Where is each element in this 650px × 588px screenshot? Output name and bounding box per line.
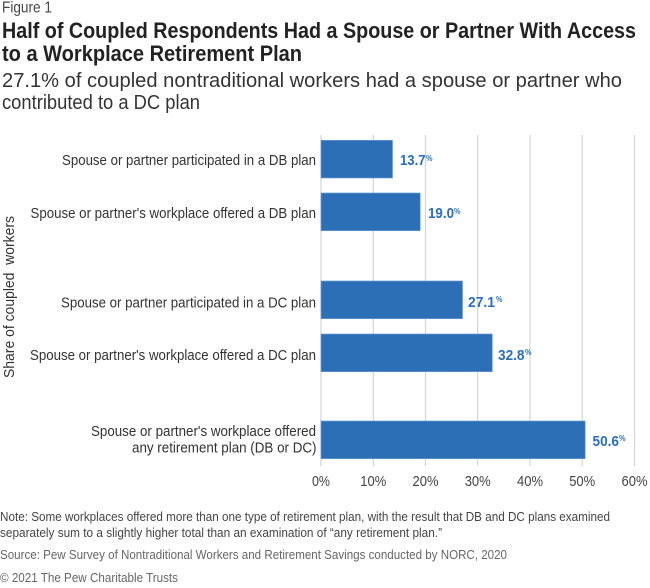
x-axis tick labels: 10% bbox=[360, 473, 386, 490]
title bbox=[2, 18, 636, 66]
x-axis tick labels: 20% bbox=[412, 473, 438, 490]
x-axis tick labels: 50% bbox=[569, 473, 595, 490]
x-axis tick labels bbox=[312, 473, 648, 490]
row: offered a DB plan: Spouse or partner's workplace offered a DB plan bbox=[30, 206, 316, 222]
row: offered a DB plan: 19.0 bbox=[428, 205, 454, 222]
note: Note: Some workplaces offered more than one type of retirement plan, with the result that DB and DC plans examined bbox=[0, 510, 610, 524]
row: participated in a DC plan bbox=[61, 281, 502, 319]
gridlines bbox=[321, 135, 634, 466]
source: Source: Pew Survey of Nontraditional Workers and Retirement Savings conducted by NORC, 2020 bbox=[0, 548, 507, 562]
bar chart bbox=[1, 135, 648, 490]
row: offered any retirement plan: any retirement plan (DB or DC) bbox=[132, 440, 316, 456]
row: offered any retirement plan: % bbox=[619, 434, 626, 443]
note bbox=[0, 510, 610, 540]
subtitle: contributed to a DC plan bbox=[2, 91, 200, 114]
title: to a Workplace Retirement Plan bbox=[2, 41, 302, 66]
y-axis title: Share of coupled workers bbox=[1, 216, 18, 378]
subtitle: 27.1% of coupled nontraditional workers had a spouse or partner who bbox=[2, 69, 622, 92]
row: participated in a DB plan bbox=[62, 140, 432, 178]
row: offered a DC plan bbox=[30, 334, 532, 372]
row: offered a DB plan: % bbox=[454, 207, 460, 216]
row: participated in a DC plan: % bbox=[496, 295, 502, 304]
figure label: Figure 1 bbox=[2, 0, 52, 16]
row: participated in a DC plan: Spouse or partner participated in a DC plan bbox=[61, 296, 316, 312]
row: participated in a DB plan: % bbox=[426, 154, 432, 163]
note: separately sum to a slightly higher total than an examination of “any retirement plan.” bbox=[0, 526, 442, 540]
row: offered a DC plan: % bbox=[525, 348, 532, 357]
x-axis tick labels: 30% bbox=[465, 473, 491, 490]
x-axis tick labels: 0% bbox=[312, 473, 330, 490]
row: offered any retirement plan: Spouse or partner's workplace offered bbox=[91, 424, 316, 440]
row: offered any retirement plan bbox=[91, 421, 626, 459]
row: offered a DB plan bbox=[30, 193, 460, 231]
row: participated in a DB plan: 13.7 bbox=[400, 152, 426, 169]
copyright: © 2021 The Pew Charitable Trusts bbox=[0, 571, 178, 585]
row: participated in a DC plan: 27.1 bbox=[468, 294, 495, 311]
row: offered a DC plan: 32.8 bbox=[498, 347, 524, 364]
row: offered any retirement plan: 50.6 bbox=[592, 433, 619, 450]
subtitle bbox=[2, 69, 622, 114]
row: participated in a DB plan: Spouse or partner participated in a DB plan bbox=[62, 153, 316, 169]
row: offered a DC plan: Spouse or partner's workplace offered a DC plan bbox=[30, 348, 316, 364]
x-axis tick labels: 40% bbox=[517, 473, 543, 490]
